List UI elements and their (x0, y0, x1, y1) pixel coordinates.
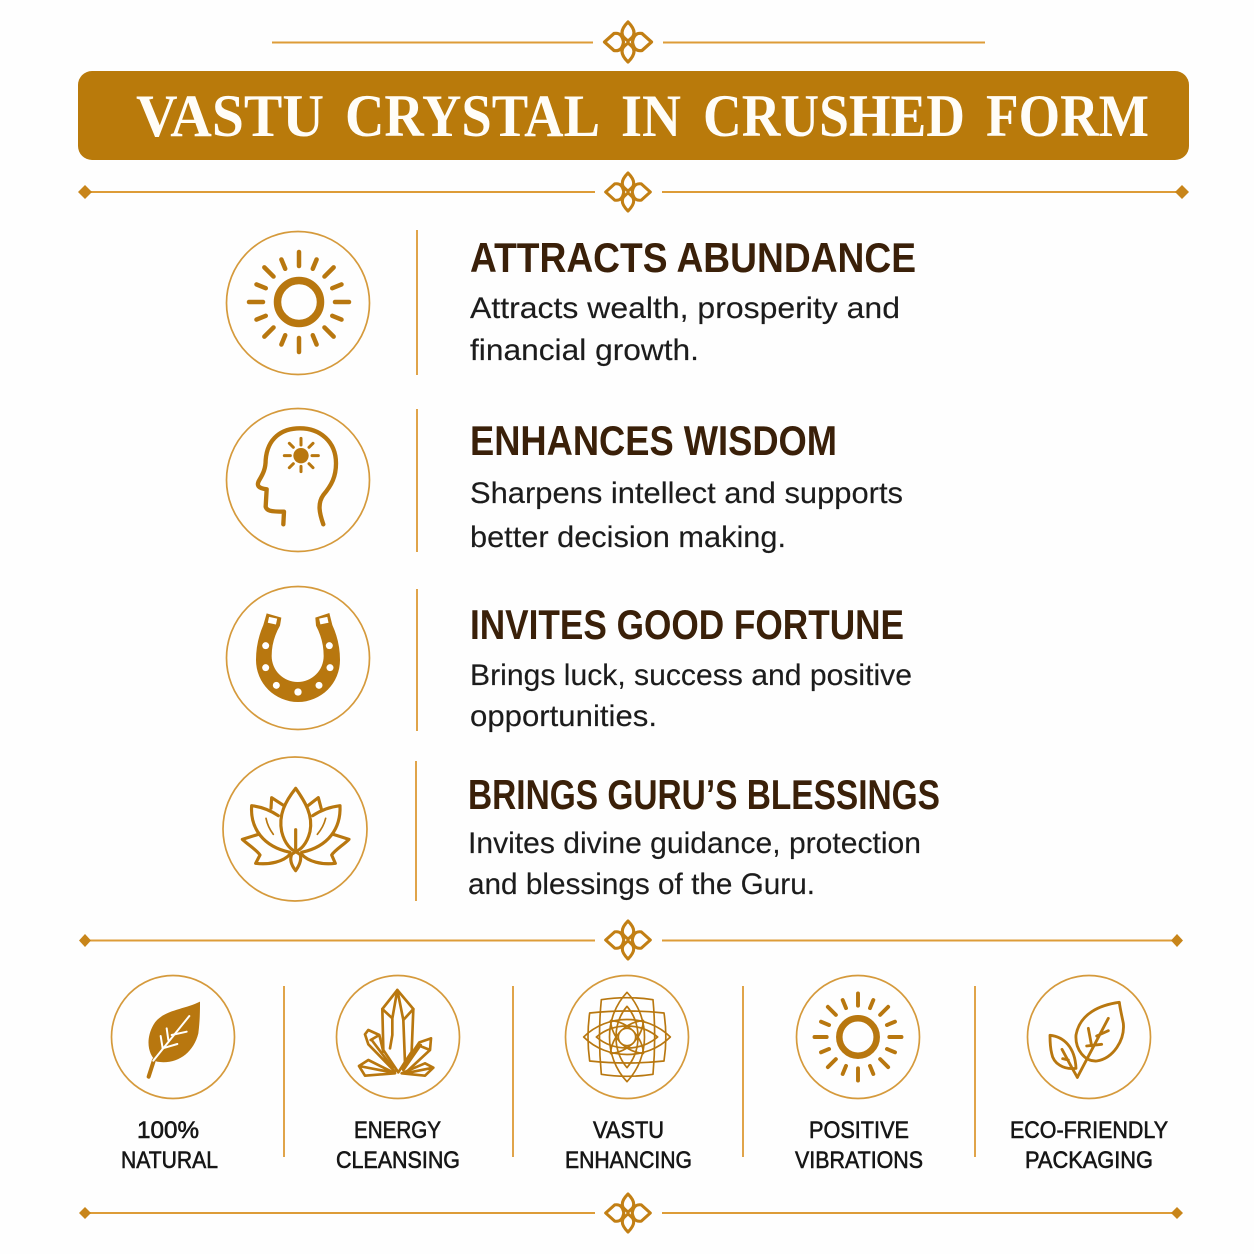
icon: two leaves (1028, 976, 1150, 1098)
title text: VASTU (136, 83, 324, 149)
label: eco-friendly packaging (1010, 1117, 1168, 1174)
heading: brings guru's blessings: BRINGS GURU’S BLESSINGS (468, 771, 940, 818)
description: invites good fortune (470, 659, 912, 733)
title text: FORM (986, 83, 1149, 149)
description: invites good fortune: opportunities. (470, 700, 657, 733)
label: energy cleansing: CLEANSING (336, 1147, 460, 1174)
feature: energy cleansing (336, 976, 460, 1174)
label: 100% natural (121, 1117, 218, 1174)
label: positive vibrations (795, 1117, 923, 1174)
feature: positive vibrations (795, 976, 923, 1174)
icon: sun (226, 232, 370, 374)
icon: sun small (796, 976, 920, 1098)
description: enhances wisdom (470, 477, 903, 554)
label: energy cleansing (336, 1117, 460, 1174)
label: vastu enhancing: ENHANCING (565, 1147, 692, 1174)
middle divider (79, 921, 1183, 959)
icon: horseshoe (226, 586, 370, 730)
icon: leaf (112, 976, 234, 1098)
label: eco-friendly packaging: ECO-FRIENDLY (1010, 1117, 1168, 1144)
label: eco-friendly packaging: PACKAGING (1025, 1147, 1153, 1174)
feature: eco-friendly packaging (1010, 976, 1168, 1174)
icon: crystal cluster (336, 976, 460, 1098)
description: enhances wisdom: better decision making. (470, 521, 786, 554)
top ornamental divider (272, 22, 985, 62)
heading: invites good fortune: INVITES GOOD FORTUNE (470, 601, 904, 648)
icon: head with sun (226, 408, 370, 552)
feature: vastu enhancing (565, 976, 692, 1174)
description: enhances wisdom: Sharpens intellect and supports (470, 477, 903, 510)
heading: enhances wisdom: ENHANCES WISDOM (470, 417, 837, 464)
title text (136, 83, 1149, 149)
benefit: brings guru's blessings (223, 757, 940, 901)
label: 100% natural: 100% (137, 1117, 199, 1144)
benefit: attracts abundance (226, 230, 916, 375)
label: energy cleansing: ENERGY (354, 1117, 441, 1144)
benefit: enhances wisdom (226, 408, 903, 554)
label: positive vibrations: POSITIVE (809, 1117, 909, 1144)
heading: attracts abundance: ATTRACTS ABUNDANCE (470, 234, 916, 281)
description: brings guru's blessings (468, 827, 921, 901)
description: attracts abundance (470, 292, 900, 367)
divider under banner (78, 173, 1189, 211)
title banner (78, 71, 1189, 160)
icon: mandala (566, 976, 688, 1098)
title text: CRUSHED (703, 83, 965, 149)
label: 100% natural: NATURAL (121, 1147, 218, 1174)
description: attracts abundance: financial growth. (470, 334, 699, 367)
feature: 100% natural (112, 976, 234, 1174)
label: vastu enhancing (565, 1117, 692, 1174)
title text: IN (621, 83, 681, 149)
label: vastu enhancing: VASTU (593, 1117, 664, 1144)
title text: CRYSTAL (345, 83, 600, 149)
description: invites good fortune: Brings luck, success and positive (470, 659, 912, 692)
description: attracts abundance: Attracts wealth, prosperity and (470, 292, 900, 325)
icon: lotus (223, 757, 367, 901)
description: brings guru's blessings: Invites divine guidance, protection (468, 827, 921, 860)
benefit: invites good fortune (226, 586, 912, 733)
bottom divider (79, 1194, 1183, 1232)
description: brings guru's blessings: and blessings of the Guru. (468, 868, 815, 901)
label: positive vibrations: VIBRATIONS (795, 1147, 923, 1174)
